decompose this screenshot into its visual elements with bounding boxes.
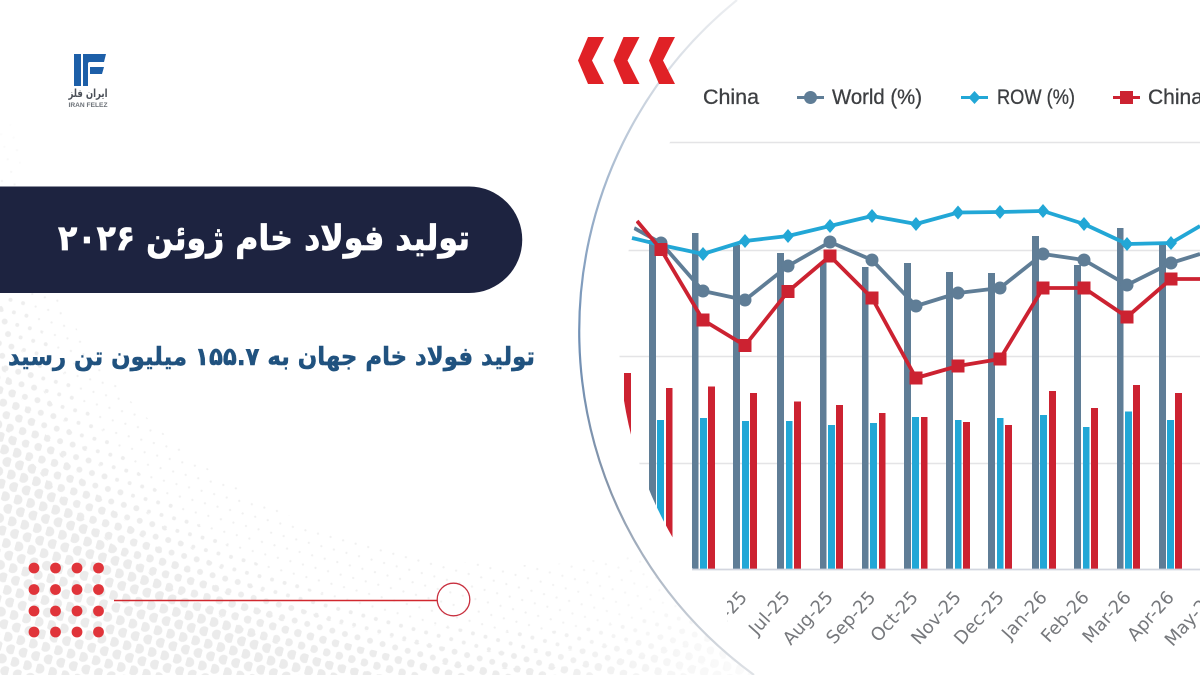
logo text Latin: IRAN FELEZ [68,102,108,109]
legend: world: World (%) [832,86,922,109]
x axis labels: Sep-25 [822,587,880,648]
x axis labels: Feb-26 [1037,587,1094,647]
icon: red chevrons [578,37,675,84]
bars: world [649,228,1166,569]
logo: Iran Felez [68,54,108,109]
subtitle: تولید فولاد خام جهان به ۱۵۵.۷ میلیون تن رسید [8,342,535,372]
x axis labels: Mar-26 [1078,587,1136,648]
x axis labels: Jan-26 [997,587,1052,645]
x axis labels: Oct-25 [867,587,923,646]
x axis labels: Jun-25 [697,587,752,645]
x axis labels: Dec-25 [950,587,1009,649]
bars: rest of world [657,412,1174,569]
x axis labels: Apr-26 [1123,587,1179,645]
x axis labels [727,590,1200,646]
x axis labels: Aug-25 [779,587,838,649]
x axis line [692,568,1200,570]
arc outline [579,0,754,675]
line: world percent [634,228,1200,312]
logo text Persian: ایران فلز [68,87,108,100]
line: rest of world percent [632,204,1200,261]
title text: تولید فولاد خام ژوئن ۲۰۲۶ [58,219,470,259]
title banner [0,186,522,293]
red dot grid [29,563,104,637]
legend: ROW [961,86,1075,109]
line: China percent [637,221,1200,384]
grid lines [600,142,1200,464]
x axis labels: Jul-25 [744,587,795,640]
legend [703,86,1200,109]
white circle panel with arc outline [579,0,1200,675]
legend: China [703,86,759,109]
bars: China [624,373,1182,569]
chart panel [600,86,1200,651]
legend: ROW: ROW (%) [997,86,1075,109]
legend: China percent [1113,86,1200,109]
red connector line with circle [114,583,470,616]
logo mark [74,54,106,86]
background: halftone dots [0,172,688,675]
x axis labels: Nov-25 [907,587,966,649]
bar chart [624,228,1182,569]
